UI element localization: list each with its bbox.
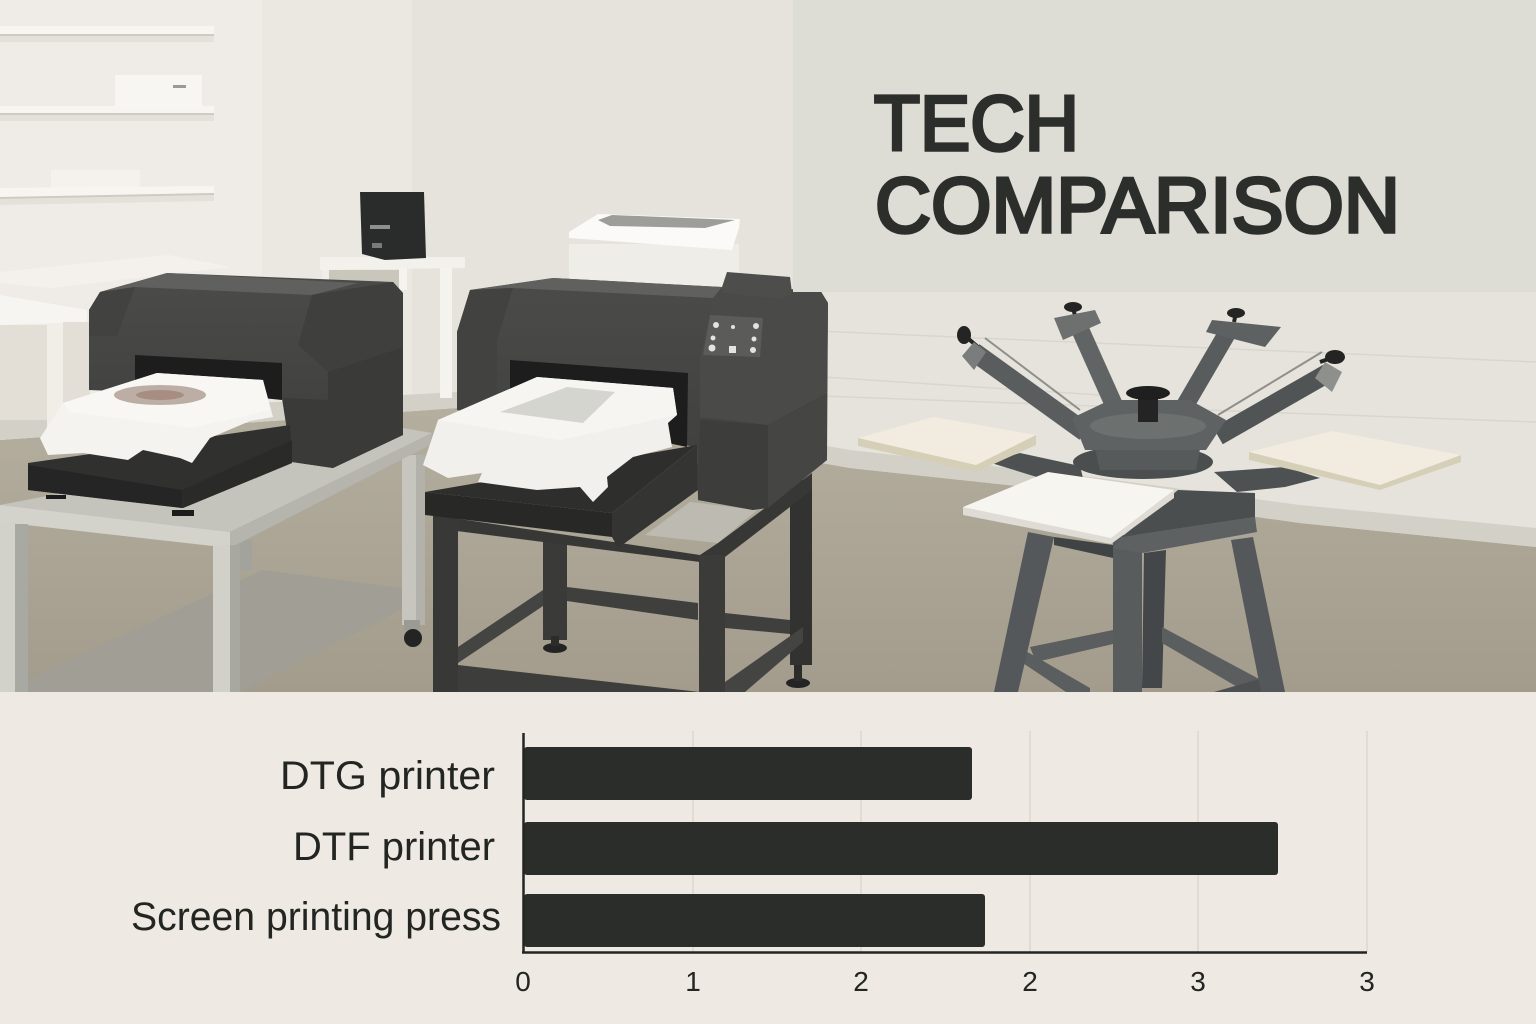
top shelf [645, 502, 757, 543]
axis tick labels: 3 [1190, 966, 1206, 997]
crossbars [567, 587, 698, 620]
bar: Screen printing press [524, 894, 985, 947]
top housing [722, 272, 792, 299]
axis tick labels [515, 966, 1375, 997]
table top [0, 428, 432, 532]
photo: print shop scene [0, 0, 1536, 692]
category labels: DTG printer [280, 754, 495, 798]
bar chart [522, 731, 1367, 953]
back legs [240, 540, 252, 570]
front legs [0, 522, 15, 692]
platen front [963, 472, 1174, 544]
print bed [28, 425, 292, 508]
screen printing press [858, 302, 1461, 692]
control panel [703, 315, 763, 357]
printer body [457, 278, 828, 510]
background table and black box [320, 192, 465, 398]
lower shelf [20, 570, 415, 692]
axis tick labels: 2 [1022, 966, 1038, 997]
printer body [89, 273, 403, 468]
category labels: Screen printing press [131, 895, 501, 939]
axis tick labels: 0 [515, 966, 531, 997]
chart panel [0, 692, 1536, 1024]
title: TECH: TECH [874, 79, 1079, 167]
category labels [131, 754, 501, 939]
title: COMPARISON: COMPARISON [875, 161, 1400, 249]
bar: DTF printer [524, 822, 1278, 875]
DTG printer left [28, 273, 403, 516]
axis tick labels: 3 [1359, 966, 1375, 997]
axis tick labels: 1 [685, 966, 701, 997]
stand [994, 490, 1285, 692]
background white printer [569, 214, 740, 288]
room background [0, 0, 1536, 692]
arm heads and knobs [957, 302, 1345, 392]
hub [1072, 386, 1226, 479]
white t-shirt with print [40, 373, 273, 463]
screen arms [964, 307, 1334, 436]
DTF printer middle [423, 272, 828, 548]
category labels: DTF printer [293, 825, 495, 869]
axis tick labels: 2 [853, 966, 869, 997]
horizontal platen arms [988, 453, 1084, 482]
print bed [425, 445, 697, 513]
white t-shirt [423, 377, 677, 502]
top rails [433, 473, 812, 565]
platen right [1249, 431, 1461, 490]
legs [543, 540, 567, 640]
middle table [433, 473, 812, 692]
title panel [793, 0, 1536, 292]
bar: DTG printer [524, 747, 972, 800]
left table [0, 428, 432, 692]
platen left [858, 417, 1036, 472]
wall shelves [0, 26, 230, 288]
background table left [0, 295, 90, 438]
